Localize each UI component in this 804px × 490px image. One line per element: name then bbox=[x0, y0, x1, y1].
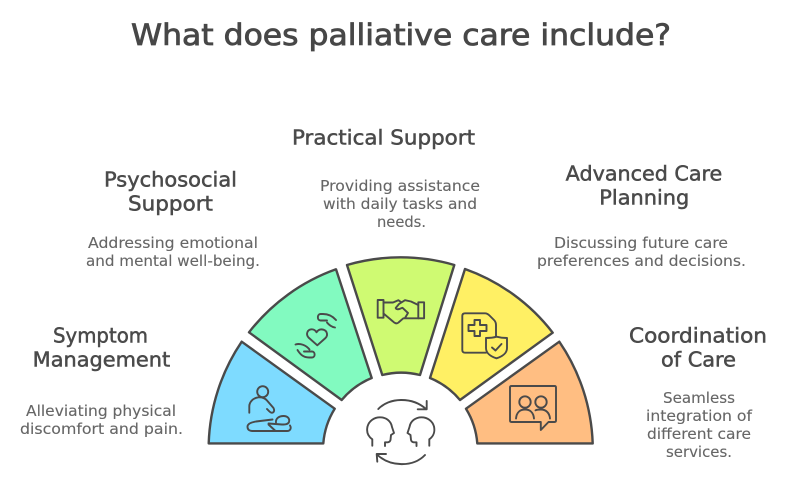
description: symptom management: discomfort and pain. bbox=[20, 420, 183, 438]
icon: heart in hands bbox=[296, 314, 336, 358]
description: coordination of care bbox=[646, 389, 753, 461]
heading: psychosocial support bbox=[104, 168, 237, 216]
segment: advanced care planning (yellow) bbox=[430, 269, 553, 400]
description: practical support: Providing assistance bbox=[320, 177, 480, 195]
description: practical support bbox=[320, 177, 480, 231]
icon: two heads with exchange arrows bbox=[367, 400, 434, 464]
panel: practical support text bbox=[292, 126, 480, 231]
description: practical support: needs. bbox=[377, 213, 426, 231]
heading: practical support: Practical Support bbox=[292, 126, 475, 150]
description: advanced care planning bbox=[537, 234, 746, 270]
heading: psychosocial support: Support bbox=[128, 192, 213, 216]
heading: coordination of care bbox=[629, 324, 767, 372]
panel: coordination of care text bbox=[629, 324, 767, 461]
description: psychosocial support: and mental well-being. bbox=[86, 252, 260, 270]
heading: coordination of care: of Care bbox=[661, 348, 736, 372]
description: psychosocial support bbox=[86, 234, 260, 270]
heading: symptom management bbox=[33, 324, 170, 372]
title: What does palliative care include? bbox=[131, 18, 671, 52]
panel: psychosocial support text bbox=[86, 168, 260, 270]
description: psychosocial support: Addressing emotional bbox=[88, 234, 258, 252]
icon: massage therapist and patient bbox=[247, 386, 291, 431]
description: coordination of care: services. bbox=[666, 443, 732, 461]
heading: symptom management: Management bbox=[33, 348, 170, 372]
segment: symptom management (blue) bbox=[209, 342, 335, 443]
heading: advanced care planning: Planning bbox=[599, 186, 689, 210]
icon: discussion chat bubble with two people bbox=[510, 386, 556, 430]
panel: advanced care planning text bbox=[537, 162, 746, 270]
description: coordination of care: different care bbox=[647, 425, 751, 443]
icon: medical document with shield bbox=[462, 313, 507, 358]
icon: handshake bbox=[378, 300, 424, 323]
heading: coordination of care: Coordination bbox=[629, 324, 767, 348]
panel: symptom management text bbox=[20, 324, 183, 438]
segment: psychosocial support (green) bbox=[249, 269, 372, 400]
description: advanced care planning: preferences and decisions. bbox=[537, 252, 746, 270]
description: practical support: with daily tasks and bbox=[323, 195, 477, 213]
heading: advanced care planning: Advanced Care bbox=[566, 162, 722, 186]
heading: psychosocial support: Psychosocial bbox=[104, 168, 237, 192]
heading: symptom management: Symptom bbox=[53, 324, 148, 348]
description: coordination of care: Seamless bbox=[663, 389, 735, 407]
description: coordination of care: integration of bbox=[646, 407, 753, 425]
description: symptom management: Alleviating physical bbox=[26, 402, 176, 420]
description: symptom management bbox=[20, 402, 183, 438]
heading: advanced care planning bbox=[566, 162, 722, 210]
segment: practical support (lime) bbox=[347, 257, 454, 375]
segment: coordination of care (orange) bbox=[466, 342, 593, 443]
description: advanced care planning: Discussing future care bbox=[554, 234, 728, 252]
